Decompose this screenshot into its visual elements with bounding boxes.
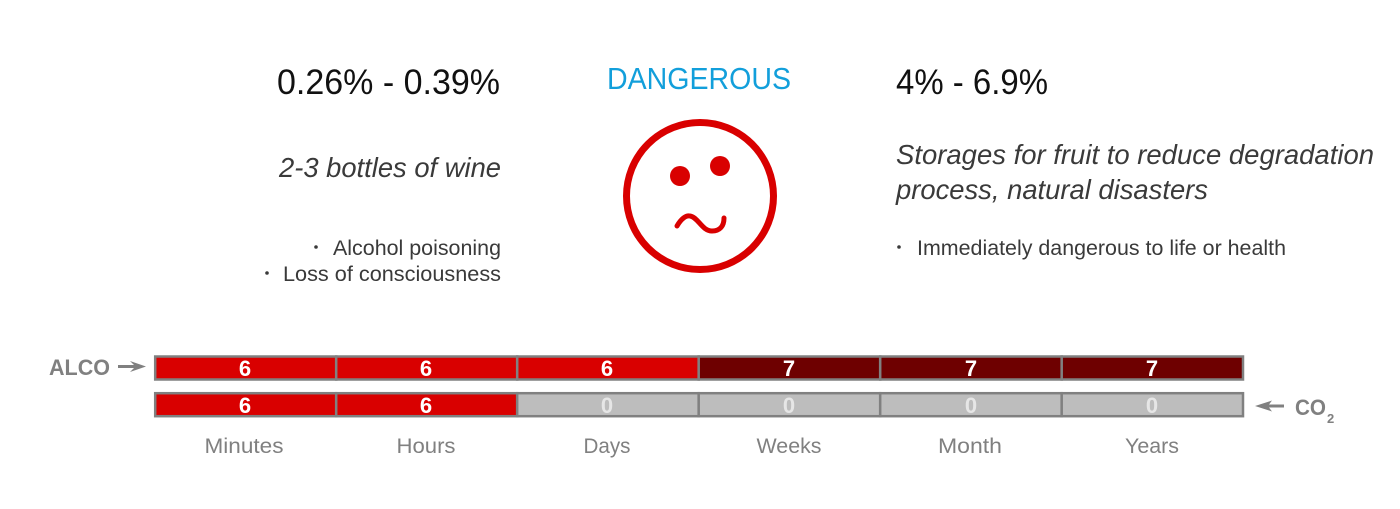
time axis labels: Years <box>1125 435 1179 458</box>
CO2 values: 0 <box>601 393 613 418</box>
CO2 values: 0 <box>965 393 977 418</box>
CO2 label: CO <box>1295 395 1326 420</box>
time axis labels: Weeks <box>756 435 822 458</box>
ALCO values: 6 <box>420 356 432 381</box>
panel: danger level <box>607 61 791 270</box>
panel: alcohol <box>265 63 501 286</box>
CO2 effects list: Immediately dangerous to life or health <box>917 237 1286 260</box>
CO2 values: 6 <box>420 393 432 418</box>
ALCO values <box>239 356 1158 381</box>
panel: exposure chart <box>49 355 1334 458</box>
time axis labels: Minutes <box>204 435 284 458</box>
time axis labels: Hours <box>396 435 456 458</box>
alcohol equivalent: 2-3 bottles of wine <box>278 152 501 183</box>
ALCO values: 7 <box>783 356 795 381</box>
CO2 situations <box>895 139 1374 205</box>
time axis labels <box>204 435 1179 458</box>
icon: sad face <box>626 122 774 270</box>
alcohol effects list: Alcohol poisoning <box>333 237 501 260</box>
CO2 values: 0 <box>783 393 795 418</box>
panel: CO2 <box>895 63 1374 260</box>
ALCO values: 6 <box>239 356 251 381</box>
ALCO label <box>49 355 146 380</box>
time axis labels: Month <box>938 435 1002 458</box>
CO2 bar <box>155 393 1243 416</box>
CO2 values: 6 <box>239 393 251 418</box>
alcohol effects list: Loss of consciousness <box>283 263 501 286</box>
CO2 situations: process, natural disasters <box>895 174 1208 205</box>
ALCO values: 7 <box>965 356 977 381</box>
danger heading: DANGEROUS <box>607 61 791 96</box>
CO2 label <box>1255 395 1334 426</box>
time axis labels: Days <box>584 435 630 458</box>
ALCO values: 7 <box>1146 356 1158 381</box>
CO2 values: 0 <box>1146 393 1158 418</box>
alcohol range heading: 0.26% - 0.39% <box>277 63 500 102</box>
arrow: CO2 <box>1255 400 1284 412</box>
CO2 values <box>239 393 1158 418</box>
CO2 label: 2 <box>1327 411 1334 426</box>
arrow: alco <box>118 361 146 372</box>
alcohol effects list <box>265 237 501 286</box>
ALCO values: 6 <box>601 356 613 381</box>
CO2 range heading: 4% - 6.9% <box>896 63 1048 102</box>
CO2 situations: Storages for fruit to reduce degradation <box>896 139 1374 170</box>
ALCO label: ALCO <box>49 355 110 380</box>
ALCO bar <box>155 356 1243 380</box>
